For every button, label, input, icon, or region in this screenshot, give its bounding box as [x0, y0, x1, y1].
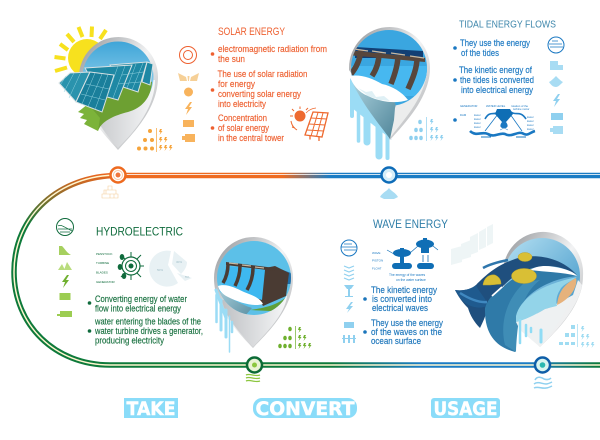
pale pie chart: 5%	[185, 275, 190, 279]
solar energy text	[211, 44, 327, 143]
tidal diagram: lower	[527, 115, 534, 119]
pale bar chart	[451, 224, 493, 265]
hydro labels	[96, 252, 116, 284]
wave converter diagram: FLOAT	[372, 266, 382, 270]
solar energy heading: SOLAR ENERGY	[218, 26, 286, 38]
tidal diagram: lower	[527, 123, 534, 127]
icon: engine	[550, 126, 563, 134]
sand	[557, 278, 576, 305]
icon: water drips	[216, 290, 232, 352]
tidal energy text: They use the energy	[460, 38, 530, 48]
wave energy text: electrical waves	[372, 303, 428, 313]
solar pin illustration	[54, 26, 158, 150]
wave energy text: is converted into	[372, 294, 432, 304]
usage label: USAGE	[434, 398, 498, 420]
green hill	[82, 72, 152, 131]
tidal diagram: lower	[527, 119, 534, 123]
icon: wave stack	[344, 266, 354, 280]
icon: dam	[59, 246, 71, 255]
icon: waves	[246, 374, 260, 382]
hydro pin illustration	[214, 237, 293, 352]
icon: yellow buoys	[483, 252, 536, 285]
tidal diagram: lower	[474, 121, 481, 125]
tidal icon column	[548, 37, 564, 134]
icon: water drips	[350, 78, 392, 158]
tidal diagram: GENERATOR	[460, 104, 477, 108]
wave energy text: ocean surface	[371, 336, 421, 346]
wave energy text	[363, 285, 443, 346]
icon: lightning	[346, 302, 353, 313]
icon: people	[342, 335, 356, 343]
tidal diagram: lower	[474, 125, 481, 129]
icon: wave circle	[56, 218, 74, 236]
icon: battery	[344, 322, 354, 328]
wave pin illustration	[455, 232, 583, 352]
icon: pyramid	[102, 186, 118, 198]
icon: turbine wheel	[118, 252, 144, 280]
solar energy text: the sun	[218, 54, 245, 64]
icon: tidal node	[382, 168, 396, 182]
icon: sun small	[184, 88, 193, 96]
pale pie chart: 50%	[157, 268, 163, 272]
white lower sheet	[516, 296, 573, 347]
icon: city water	[550, 61, 563, 70]
tidal energy flows heading: TIDAL ENERGY FLOWS	[459, 18, 556, 30]
solar energy text: electromagnetic radiation from	[218, 44, 327, 54]
wave converter diagram: PISTON	[372, 258, 383, 262]
icon: water splash	[380, 188, 398, 199]
tidal diagram: rotation of the	[511, 104, 529, 108]
icon: lightning	[62, 275, 69, 288]
hydroelectric text: Converting energy of water	[95, 294, 187, 304]
icon: open book	[178, 73, 199, 81]
hydroelectric text: water turbine drives a generator,	[94, 326, 203, 336]
hydro labels: GENERATOR	[96, 280, 116, 284]
tidal diagram: turbine motor	[513, 107, 530, 111]
light blue sheet	[516, 277, 577, 322]
route line connecting the stages	[14, 174, 600, 365]
tidal energy text: of the tides	[461, 48, 499, 58]
icon: wave circle	[548, 37, 564, 53]
tidal energy text: The kinetic energy of	[459, 65, 532, 75]
dark wave crest and tail	[455, 256, 577, 328]
solar energy text: of solar energy	[218, 123, 269, 133]
wave converter diagram: WAVE	[372, 251, 381, 255]
wave energy text: of the waves on the	[371, 327, 442, 337]
tidal diagram: lower	[474, 113, 481, 117]
tidal pin illustration	[347, 27, 430, 158]
icon: engine	[57, 311, 72, 317]
tidal diagram: lower	[474, 117, 481, 121]
hydroelectric text: producing electricity	[95, 336, 164, 346]
wave energy heading: WAVE ENERGY	[373, 219, 448, 231]
hydro stats icons	[278, 326, 312, 349]
hydroelectric text: water entering the blades of the	[94, 316, 201, 326]
pale pie chart	[149, 251, 192, 287]
icon: sun	[54, 26, 106, 77]
hydro labels: PENSTOCK	[96, 252, 112, 256]
tidal energy text: into electrical energy	[461, 85, 533, 95]
wave converter diagram: The energy of the waves	[389, 273, 425, 277]
tidal diagram: DAM	[460, 113, 467, 117]
solar energy text: for energy	[218, 79, 255, 89]
wave energy text: The kinetic energy	[371, 285, 437, 295]
solar energy text: into electricity	[218, 99, 266, 109]
hydro labels: BLADES	[96, 270, 108, 274]
icon: engine	[182, 134, 195, 142]
dam pillars	[351, 50, 417, 89]
pin body	[503, 232, 583, 347]
icon: turbine	[549, 76, 563, 87]
tidal energy text: the tides is converted	[460, 75, 534, 85]
solar energy text: converting solar energy	[218, 89, 301, 99]
tidal diagram: lower	[527, 127, 534, 131]
tidal diagram: WATER LEVEL	[486, 104, 506, 108]
tidal diagram	[460, 104, 535, 137]
icon: battery	[551, 113, 563, 120]
mid blue sheet	[485, 268, 577, 352]
hydroelectric icon column	[56, 218, 74, 317]
solar energy text: Concentration	[218, 113, 267, 123]
wave converter diagram: on the water surface	[396, 278, 426, 282]
tidal energy text	[453, 38, 534, 122]
icon: hydro node	[247, 358, 262, 372]
wave energy text: They use the energy	[371, 318, 443, 328]
solar energy stats icons	[137, 128, 172, 152]
icon: waves	[534, 377, 552, 388]
icon: lightning	[553, 94, 560, 107]
icon: target	[180, 46, 196, 64]
foam and water	[353, 84, 396, 139]
hydroelectric text	[88, 294, 203, 346]
wave icon column	[341, 240, 357, 343]
take label: TAKE	[126, 398, 176, 420]
icon: battery	[183, 120, 194, 127]
icon: solar panel with sun	[290, 106, 328, 141]
icon: wave node	[535, 358, 550, 372]
hydroelectric heading: HYDROELECTRIC	[96, 224, 183, 238]
solar icon column	[178, 46, 199, 142]
drips	[520, 320, 541, 343]
convert label: CONVERT	[256, 398, 355, 420]
solar energy text: The use of solar radiation	[218, 69, 308, 79]
icon: turbines	[58, 262, 72, 270]
icon: lightning	[185, 102, 192, 115]
tidal energy stats icons	[409, 117, 444, 141]
hydroelectric text: flow into electrical energy	[95, 304, 181, 314]
icon: battery	[60, 293, 70, 300]
wave stats icons	[559, 324, 594, 348]
icon: solar node	[110, 168, 126, 182]
pale pie chart: 30%	[176, 260, 182, 264]
icon: wave circle	[341, 240, 357, 256]
hydro labels: TURBINE	[96, 261, 109, 265]
wave converter diagram	[372, 238, 438, 282]
icon: lamp post	[344, 285, 354, 297]
solar energy text: in the central tower	[218, 133, 284, 143]
